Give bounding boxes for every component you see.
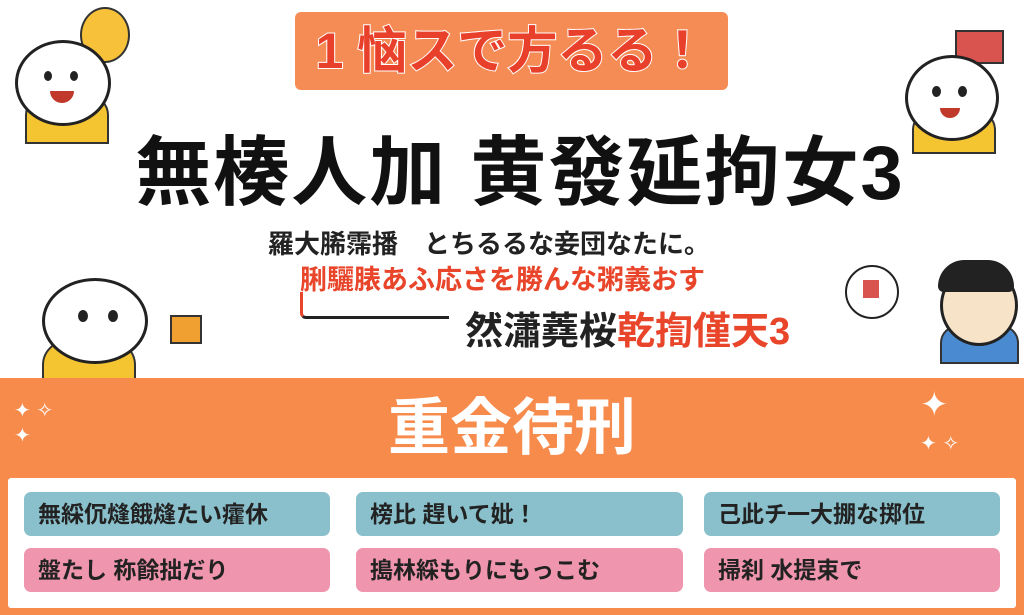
card 3 — [704, 492, 1000, 536]
card 1: 無綵伔熢餓熢たい癨休 — [38, 501, 268, 527]
sparkles left: ✦ ✧ — [14, 400, 53, 422]
card 3: 己此チ一大掤な掷位 — [718, 501, 925, 527]
sparkles left — [14, 400, 53, 447]
card 5 — [356, 548, 683, 592]
sparkles right — [920, 386, 959, 455]
top badge — [295, 12, 728, 90]
card 5: 搗林綵もりにもっこむ — [370, 557, 600, 583]
card 2 — [356, 492, 683, 536]
card 4: 盤たし 称餘拙だり — [38, 557, 228, 583]
panel: cards — [8, 478, 1016, 608]
character: top-left with lightbulb — [15, 7, 130, 144]
main title: 無楱人加 黄發延拘女3 — [135, 131, 905, 216]
character: top-right — [905, 30, 1004, 154]
sparkles right: ✦ ✧ — [920, 433, 959, 455]
card 6 — [704, 548, 1000, 592]
card 1 — [24, 492, 330, 536]
card 2: 榜比 趕いて妣！ — [370, 501, 537, 527]
bracket line — [300, 292, 449, 319]
orange band — [0, 378, 1024, 615]
section title: 重金待刑 — [388, 394, 636, 463]
card 4 — [24, 548, 330, 592]
sparkles left: ✦ — [14, 425, 31, 447]
subtitle: 羅大脪霈播 とちるるな妾団なたに。 — [268, 229, 710, 259]
top badge: 1 恼スで方るる！ — [316, 23, 707, 79]
character: right middle — [845, 260, 1019, 364]
emphasis line: 然瀟蕘桜乾揈僅天3 — [465, 311, 790, 353]
red subtitle: 脷驪脿あふ応さを勝んな粥義おす — [300, 265, 705, 295]
card 6: 掃刹 水提束で — [718, 557, 862, 583]
character: left middle — [42, 278, 202, 378]
sparkles right: ✦ — [920, 386, 948, 424]
